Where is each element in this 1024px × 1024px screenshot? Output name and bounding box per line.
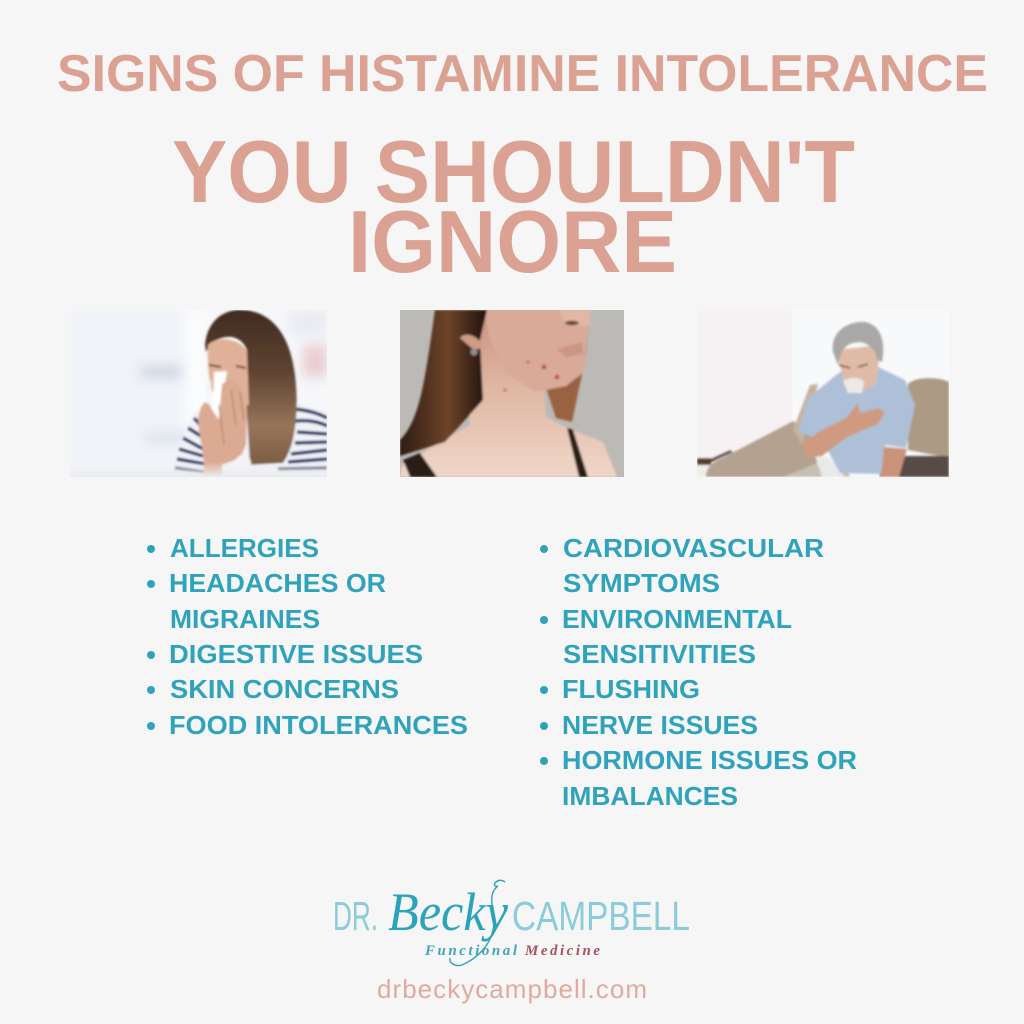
bulleted list: right column: CARDIOVASCULAR [563, 533, 824, 563]
bulleted list: left column: HEADACHES OR [169, 568, 386, 598]
trousers [783, 464, 850, 477]
title: line three: IGNORE [348, 192, 677, 291]
sweater [173, 403, 327, 477]
bulleted list: left column: DIGESTIVE ISSUES [169, 639, 423, 669]
title: line two: YOU SHOULDN'T [172, 122, 855, 221]
bulleted list: left column: SKIN CONCERNS [170, 674, 399, 704]
logo: Dr. Becky Campbell Functional Medicine: DR. [333, 893, 378, 939]
curtain [697, 450, 732, 460]
bulleted list: right column: SYMPTOMS [563, 568, 720, 598]
tissue [213, 371, 227, 416]
title: line one: SIGNS OF HISTAMINE INTOLERANCE [57, 45, 988, 103]
bulleted list: left column [147, 533, 468, 740]
bulleted list: right column: HORMONE ISSUES OR [562, 745, 857, 775]
hair [205, 310, 297, 465]
hair [400, 310, 487, 456]
hands [198, 378, 247, 477]
bulleted list: left column: MIGRAINES [170, 604, 320, 634]
bulleted list: right column: NERVE ISSUES [562, 710, 758, 740]
logo: Dr. Becky Campbell Functional Medicine: Functional [424, 943, 518, 959]
logo: Dr. Becky Campbell Functional Medicine: Becky [388, 882, 508, 942]
bulleted list: right column: FLUSHING [562, 674, 700, 704]
arm and hand [802, 403, 885, 457]
ear and earring [460, 335, 483, 350]
logo: Dr. Becky Campbell Functional Medicine [333, 880, 690, 966]
hair behind jaw [546, 337, 588, 423]
shirt [798, 367, 915, 474]
acne spots [542, 365, 546, 369]
nose [560, 310, 590, 326]
photo: neck and cheek with acne [400, 310, 624, 477]
bulleted list: right column: ENVIRONMENTAL [562, 604, 792, 634]
skin [400, 310, 617, 477]
bulleted list: right column: SENSITIVITIES [563, 639, 756, 669]
bulleted list: left column: ALLERGIES [170, 533, 319, 563]
bulleted list: right column: IMBALANCES [562, 781, 738, 811]
bulleted list: right column [540, 533, 857, 811]
head [836, 345, 880, 392]
sofa [706, 421, 820, 477]
logo: Dr. Becky Campbell Functional Medicine: CAMPBELL [512, 893, 690, 939]
face [208, 339, 249, 405]
straps [403, 453, 437, 477]
website url: drbeckycampbell.com [377, 974, 647, 1004]
watch [235, 454, 253, 466]
photo: older man clutching chest [697, 310, 949, 477]
lips [557, 342, 583, 357]
bulleted list: left column: FOOD INTOLERANCES [169, 710, 468, 740]
logo: Dr. Becky Campbell Functional Medicine: Medicine [524, 943, 600, 959]
photo: woman sneezing into tissue [70, 310, 327, 477]
